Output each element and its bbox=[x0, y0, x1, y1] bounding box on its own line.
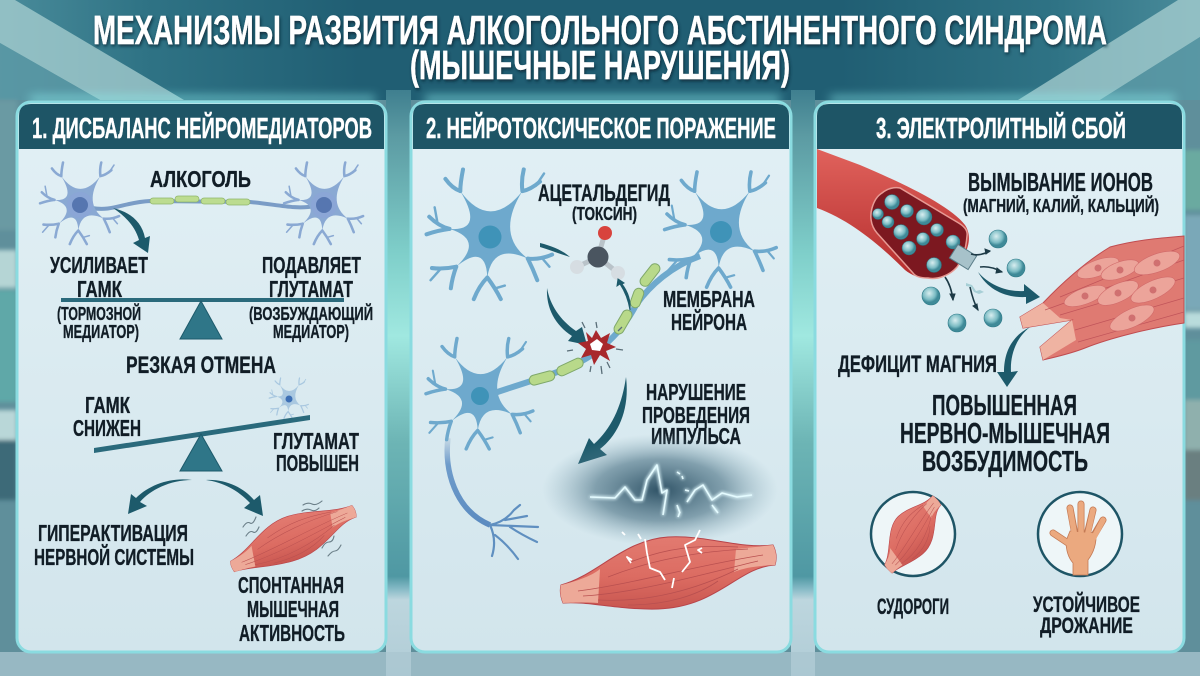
panel: электролитный сбой bbox=[815, 102, 1184, 652]
text: возбуждающий медиатор bbox=[249, 303, 373, 342]
panel 3 header bbox=[817, 104, 1182, 149]
text: глутамат повышен bbox=[273, 428, 359, 476]
text: спонтанная мышечная активность: АКТИВНОСТЬ bbox=[239, 620, 345, 646]
text: мембрана нейрона bbox=[663, 286, 755, 335]
released ions bbox=[922, 230, 1025, 332]
text: нарушение проведения импульса: ПРОВЕДЕНИЯ bbox=[642, 402, 750, 428]
text: повышенная возбудимость: ПОВЫШЕННАЯ bbox=[932, 390, 1077, 422]
arrow: ions to muscle bbox=[978, 272, 1040, 304]
arrow: molecule to membrane bbox=[617, 279, 630, 310]
text: гамк снижен: СНИЖЕН bbox=[73, 415, 141, 441]
arrow: to muscle bbox=[206, 480, 263, 516]
text: гиперактивация нервной системы: ГИПЕРАКТИВАЦИЯ bbox=[38, 520, 188, 546]
icon: dark glow with lightning bbox=[542, 434, 778, 546]
neurons and axons bbox=[426, 170, 776, 559]
text: нарушение проведения импульса: НАРУШЕНИЕ bbox=[646, 379, 746, 405]
text: спонтанная мышечная активность: СПОНТАННАЯ bbox=[238, 572, 344, 598]
text: гамк снижен bbox=[73, 392, 141, 441]
title: (МЫШЕЧНЫЕ НАРУШЕНИЯ) bbox=[410, 42, 790, 88]
label: резкая отмена: РЕЗКАЯ ОТМЕНА bbox=[126, 352, 276, 379]
panel: дисбаланс нейромедиаторов bbox=[17, 102, 386, 652]
text: тормозной медиатор: МЕДИАТОР) bbox=[63, 321, 139, 342]
text: возбуждающий медиатор: (ВОЗБУЖДАЮЩИЙ bbox=[249, 303, 373, 324]
text: глутамат повышен: ПОВЫШЕН bbox=[276, 450, 359, 476]
panel 2 header: 2. НЕЙРОТОКСИЧЕСКОЕ ПОРАЖЕНИЕ bbox=[426, 111, 776, 145]
icon: damaged muscle bbox=[560, 530, 776, 609]
arrow: to lesion bbox=[547, 288, 587, 345]
panel 1 header bbox=[19, 104, 384, 149]
icon: lesion burst bbox=[567, 322, 623, 374]
balance scale: tilted bbox=[94, 415, 310, 471]
icon: twitching muscle bbox=[223, 500, 363, 576]
text: подавляет глутамат bbox=[262, 252, 361, 302]
text: нарушение проведения импульса: ИМПУЛЬСА bbox=[651, 423, 741, 449]
text: ацетальдегид: (ТОКСИН) bbox=[572, 204, 637, 224]
arrow: to impulse disruption bbox=[578, 377, 627, 464]
text: тормозной медиатор bbox=[57, 303, 141, 342]
small neuron bbox=[269, 378, 308, 418]
text: повышенная возбудимость: ВОЗБУДИМОСТЬ bbox=[922, 446, 1088, 478]
text: подавляет глутамат: ГЛУТАМАТ bbox=[269, 276, 353, 302]
title bbox=[93, 7, 1107, 88]
icon: hand in circle bbox=[1038, 492, 1122, 576]
text: усиливает гамк bbox=[50, 252, 148, 302]
icon: muscle cells bbox=[1020, 236, 1184, 360]
icon: acetaldehyde molecule bbox=[570, 226, 625, 280]
text: гиперактивация нервной системы: НЕРВНОЙ СИСТЕМЫ bbox=[34, 543, 194, 570]
text: устойчивое дрожание: ДРОЖАНИЕ bbox=[1040, 613, 1133, 638]
text: мембрана нейрона: НЕЙРОНА bbox=[671, 308, 747, 335]
text: возбуждающий медиатор: МЕДИАТОР) bbox=[273, 321, 349, 342]
text: глутамат повышен: ГЛУТАМАТ bbox=[273, 428, 359, 454]
arrow: to hyperactivation bbox=[128, 479, 192, 514]
text: нарушение проведения импульса bbox=[642, 379, 750, 449]
balance scale: level bbox=[61, 298, 344, 339]
arrow: muscle to magnesium deficit bbox=[997, 327, 1030, 387]
panel: нейротоксическое поражение bbox=[411, 102, 791, 652]
arrow: neuron to molecule bbox=[540, 243, 570, 257]
text: спонтанная мышечная активность bbox=[238, 572, 345, 646]
label: судороги: СУДОРОГИ bbox=[877, 594, 949, 619]
text: усиливает гамк: ГАМК bbox=[77, 276, 123, 302]
text: ацетальдегид: АЦЕТАЛЬДЕГИД bbox=[538, 180, 670, 207]
text: ацетальдегид bbox=[538, 180, 670, 224]
text: устойчивое дрожание bbox=[1033, 592, 1140, 638]
icon: blood vessel with ions bbox=[817, 149, 977, 279]
text: усиливает гамк: УСИЛИВАЕТ bbox=[50, 252, 148, 278]
text: вымывание ионов bbox=[963, 167, 1159, 216]
neuron pair with axon bbox=[40, 162, 363, 244]
label: алкоголь: АЛКОГОЛЬ bbox=[150, 166, 251, 192]
text: спонтанная мышечная активность: МЫШЕЧНАЯ bbox=[247, 596, 339, 622]
arrow: neuron to GABA bbox=[113, 208, 150, 253]
text: мембрана нейрона: МЕМБРАНА bbox=[663, 286, 755, 312]
icon: muscle in circle bbox=[866, 491, 958, 577]
text: повышенная возбудимость bbox=[900, 390, 1110, 478]
text: гамк снижен: ГАМК bbox=[85, 392, 131, 418]
text: гиперактивация нервной системы bbox=[34, 520, 194, 570]
text: подавляет глутамат: ПОДАВЛЯЕТ bbox=[262, 252, 361, 278]
text: тормозной медиатор: (ТОРМОЗНОЙ bbox=[57, 303, 141, 324]
panel 2 header bbox=[413, 104, 789, 149]
text: устойчивое дрожание: УСТОЙЧИВОЕ bbox=[1033, 592, 1140, 617]
label: дефицит магния: ДЕФИЦИТ МАГНИЯ bbox=[838, 351, 997, 378]
panel 1 header: 1. ДИСБАЛАНС НЕЙРОМЕДИАТОРОВ bbox=[32, 111, 372, 145]
